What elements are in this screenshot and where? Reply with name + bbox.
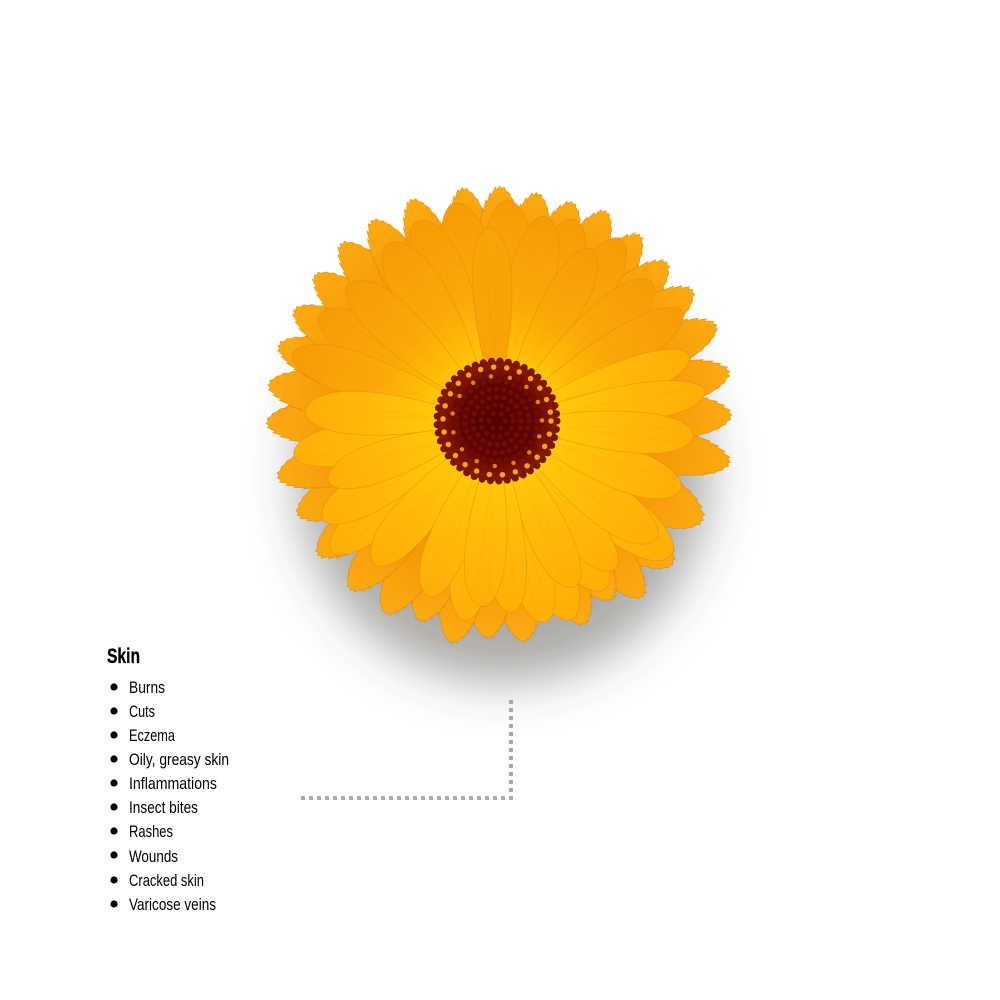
calendula flower: [264, 184, 734, 648]
bullet list: Inflammations: [129, 774, 217, 793]
bullet list: Cuts: [129, 702, 155, 721]
front petals: [286, 212, 708, 614]
bullet list: Cracked skin: [129, 871, 204, 890]
bullet list: Rashes: [129, 822, 173, 841]
bullet list: Burns: [129, 678, 165, 697]
bullet list: Eczema: [129, 726, 175, 745]
skin text block: [107, 645, 229, 914]
bullet list: Oily, greasy skin: [129, 750, 229, 769]
bullet list: Wounds: [129, 847, 178, 866]
outer back petals: [264, 184, 734, 648]
stamens: [439, 363, 555, 479]
flower shadow: [297, 266, 709, 682]
heading: Skin: Skin: [107, 645, 140, 668]
bullet list: [110, 678, 229, 914]
middle petals: [369, 198, 686, 628]
bullet list: Insect bites: [129, 798, 198, 817]
central disk: [437, 361, 557, 481]
bullet list: Varicose veins: [129, 895, 216, 914]
dotted connector line: [301, 700, 513, 798]
